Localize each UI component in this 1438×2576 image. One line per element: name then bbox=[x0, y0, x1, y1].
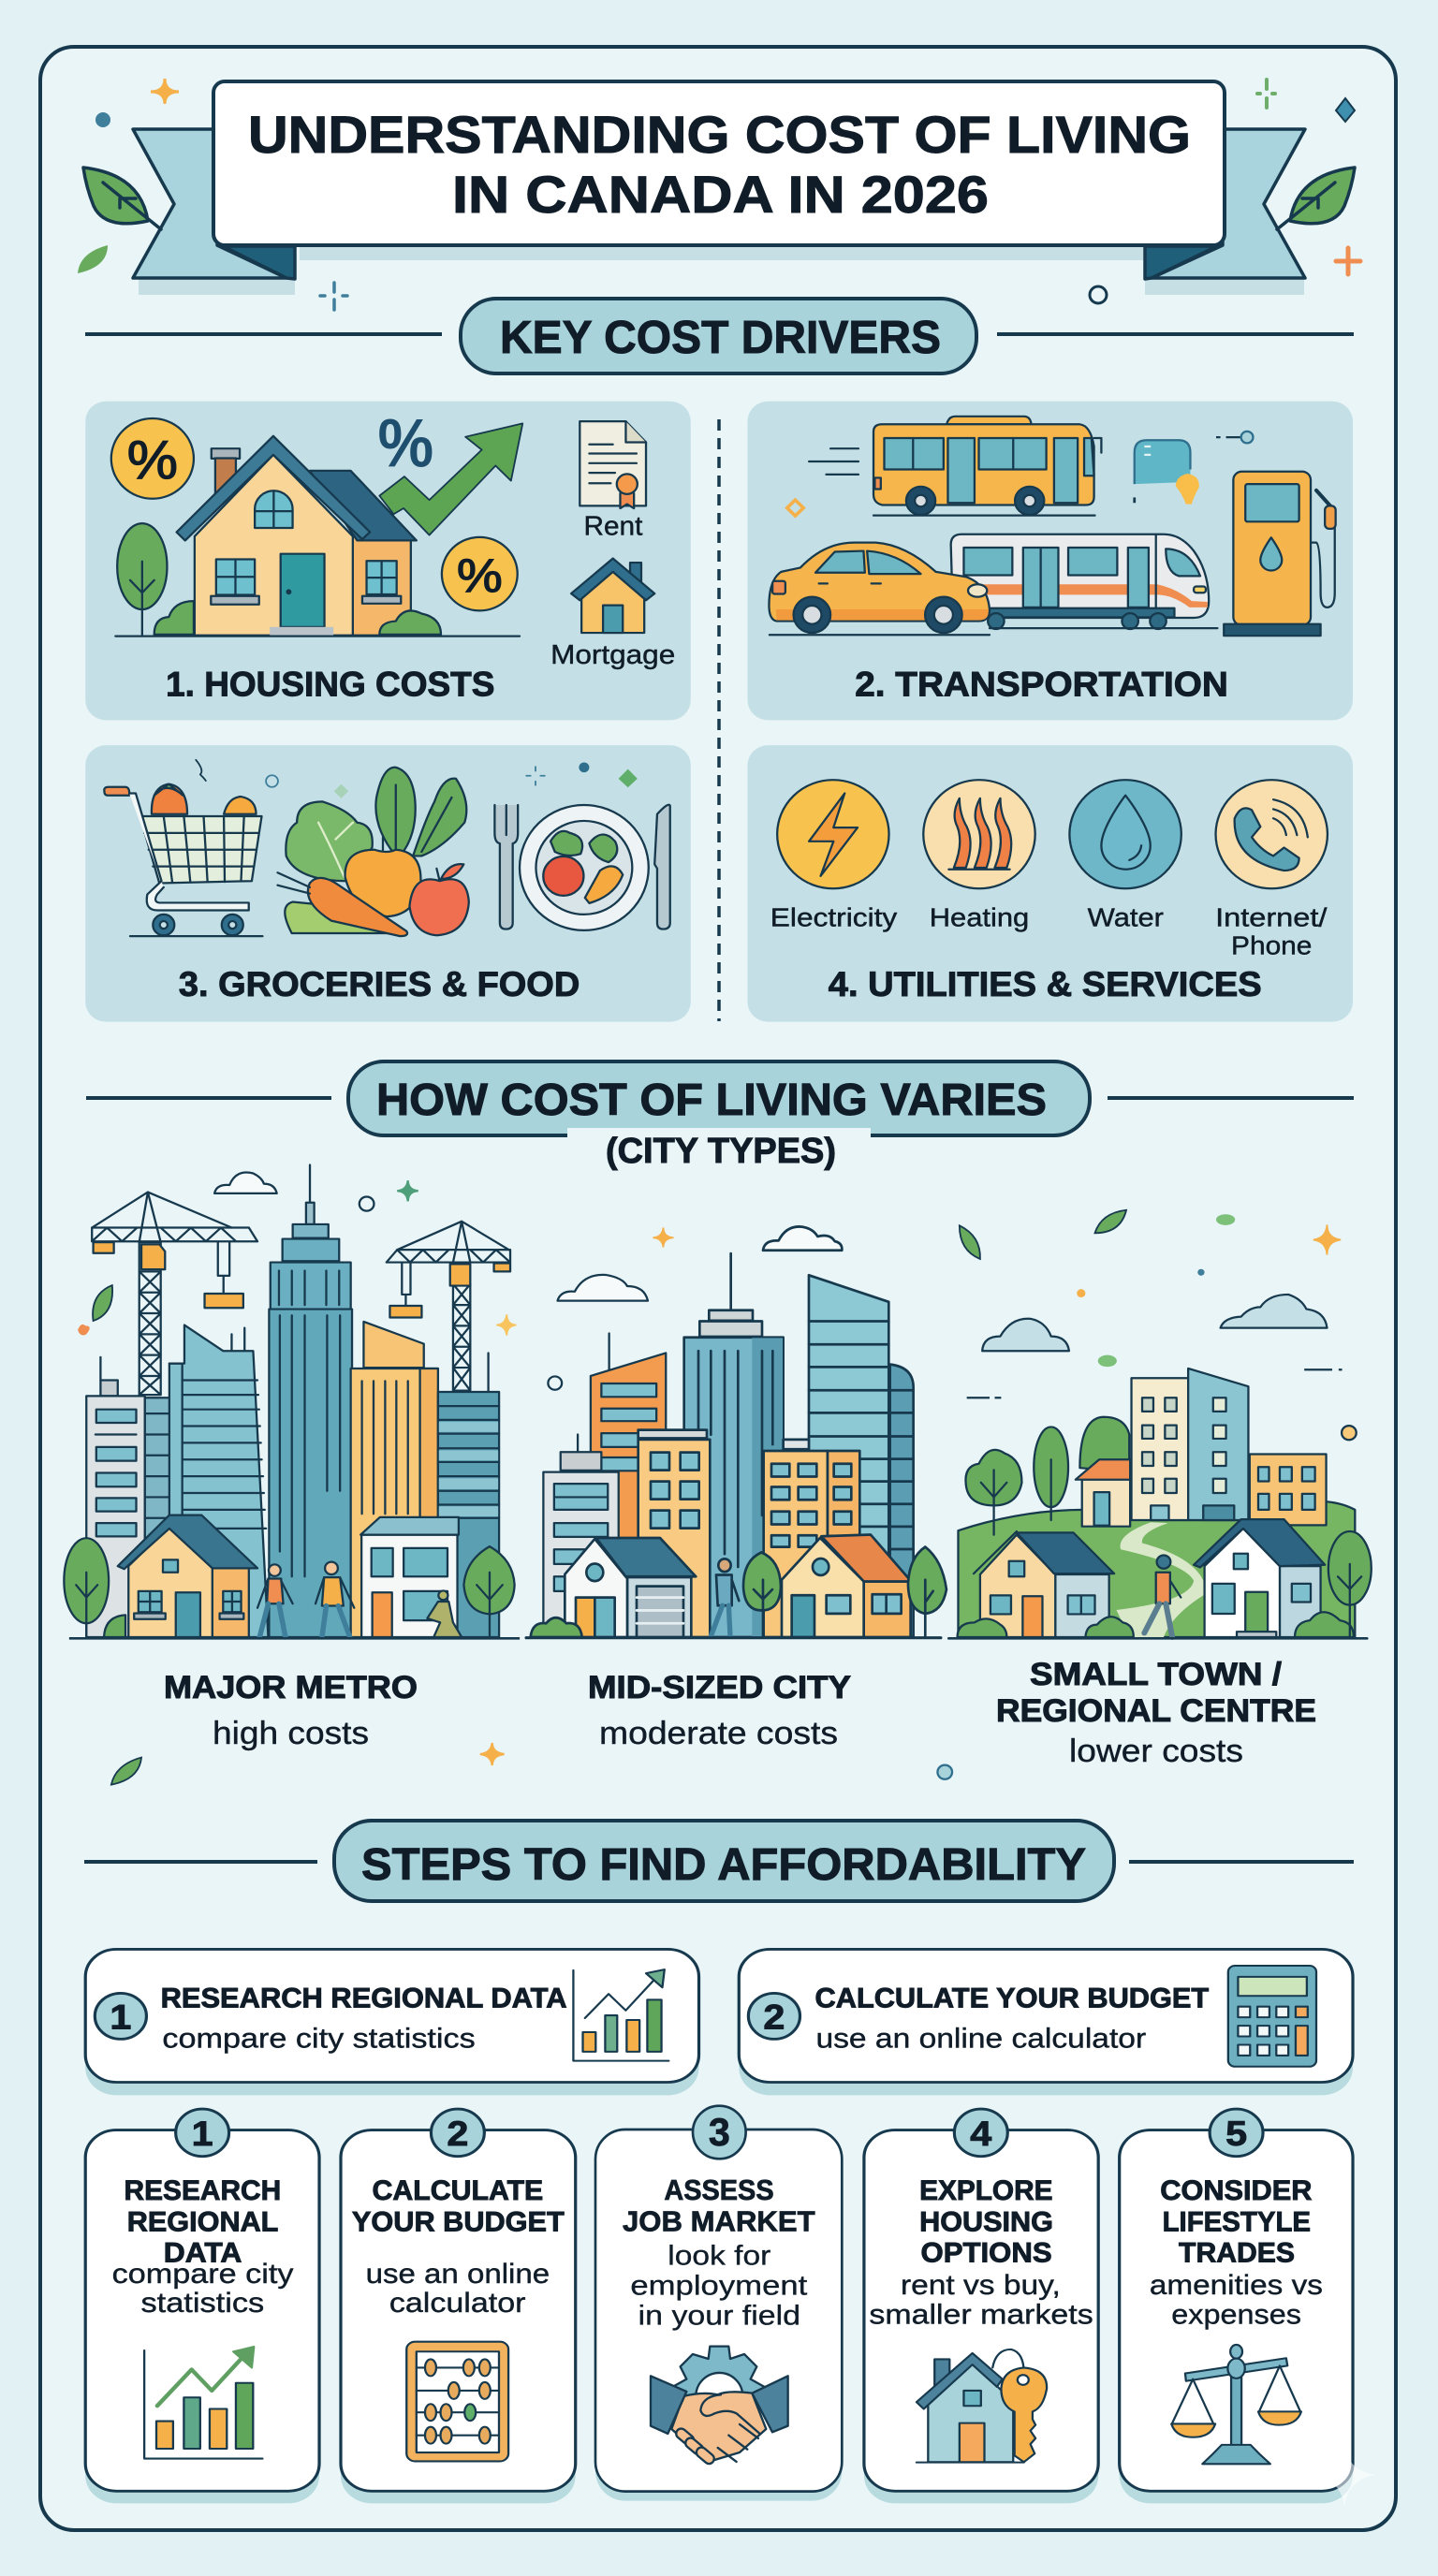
number badge: 2 bbox=[763, 1998, 785, 2037]
right crane bbox=[387, 1222, 510, 1391]
card description bbox=[366, 2259, 550, 2319]
card description: expenses bbox=[1171, 2299, 1301, 2330]
orange-roof house bbox=[782, 1535, 911, 1637]
city labels: major metro: high costs bbox=[213, 1716, 369, 1751]
step summary card 1 bbox=[85, 1949, 699, 2095]
ground line bbox=[69, 1635, 520, 1641]
icon: balance scales bbox=[1171, 2345, 1301, 2464]
icon: electricity bbox=[777, 780, 889, 888]
panel: transportation bbox=[747, 402, 1353, 720]
decorative sparkles bbox=[78, 1180, 674, 1785]
number badge: 3 bbox=[709, 2111, 730, 2154]
illustration: small town bbox=[937, 1210, 1372, 1779]
icon: rising arrow bbox=[379, 423, 522, 535]
grey office building bbox=[86, 1357, 170, 1637]
icon: calculator bbox=[1228, 1966, 1316, 2067]
card description: amenities vs bbox=[1150, 2270, 1323, 2301]
left house bbox=[1055, 1574, 1109, 1637]
number badge bbox=[176, 2109, 229, 2157]
icon: bus bbox=[809, 417, 1101, 516]
card description bbox=[869, 2270, 1093, 2330]
card description: use an online bbox=[366, 2259, 550, 2289]
panel title: 3. GROCERIES & FOOD bbox=[179, 965, 580, 1004]
step summary card 2 bbox=[739, 1949, 1353, 2095]
card text: use an online calculator bbox=[815, 2023, 1146, 2054]
decorative dots bbox=[266, 762, 638, 798]
card heading: OPTIONS bbox=[921, 2237, 1052, 2268]
panel title: 1. HOUSING COSTS bbox=[166, 666, 494, 704]
card heading: LIFESTYLE bbox=[1163, 2206, 1311, 2237]
illustration: mid-sized city bbox=[526, 1226, 946, 1638]
ground bbox=[526, 1633, 941, 1642]
white house with garage bbox=[531, 1538, 696, 1637]
icon: house bbox=[115, 436, 520, 637]
section heading: key cost drivers bbox=[85, 299, 1354, 373]
icon: heating bbox=[923, 780, 1035, 888]
card heading: CALCULATE bbox=[373, 2175, 543, 2205]
icon labels: Water bbox=[1088, 903, 1164, 931]
card heading: RESEARCH bbox=[125, 2175, 281, 2205]
panel: housing costs bbox=[85, 402, 691, 720]
winding path bbox=[1116, 1522, 1207, 1637]
percent sign: % bbox=[377, 403, 433, 481]
icon: train bbox=[951, 534, 1217, 629]
card heading bbox=[623, 2174, 815, 2237]
trees and bush bbox=[64, 1538, 515, 1637]
icon: bar chart bbox=[573, 1969, 668, 2061]
card description bbox=[112, 2259, 294, 2319]
number badge: 4 bbox=[970, 2115, 992, 2153]
city labels: mid-sized: moderate costs bbox=[599, 1716, 838, 1751]
city labels: small town: REGIONAL CENTRE bbox=[996, 1693, 1316, 1729]
title text: UNDERSTANDING COST OF LIVING bbox=[248, 105, 1191, 164]
city labels: mid-sized bbox=[588, 1670, 851, 1751]
bushes and right tree bbox=[958, 1618, 1006, 1637]
card description: employment bbox=[630, 2271, 807, 2302]
icon: vegetables bbox=[277, 768, 469, 936]
card heading: TRADES bbox=[1179, 2237, 1295, 2268]
floating leaves and dots bbox=[937, 1210, 1357, 1779]
tree right bbox=[908, 1547, 946, 1637]
icon: internet and phone bbox=[1216, 780, 1328, 888]
card heading bbox=[352, 2175, 565, 2237]
decorative leaves and sparkles in header bbox=[78, 79, 1360, 310]
section heading: steps to find affordability bbox=[84, 1821, 1354, 1901]
step card 2: calculate your budget bbox=[341, 2109, 576, 2503]
icon: growth chart bbox=[144, 2347, 262, 2459]
trees bbox=[743, 1552, 781, 1637]
cloud bbox=[763, 1226, 842, 1251]
panel: groceries and food bbox=[85, 745, 691, 1022]
panel title: 4. UTILITIES & SERVICES bbox=[829, 965, 1262, 1004]
icon: percent coin lower: % bbox=[457, 549, 503, 602]
number badge bbox=[954, 2109, 1007, 2157]
icon: shopping cart bbox=[104, 760, 262, 936]
ribbon shadows bbox=[139, 247, 1304, 295]
card description bbox=[630, 2240, 807, 2331]
card heading: HOUSING bbox=[919, 2206, 1053, 2237]
icon: house and key bbox=[917, 2349, 1047, 2463]
watermark sparkle bbox=[1313, 2445, 1376, 2507]
icon: fork and plate bbox=[494, 805, 670, 930]
card text: compare city statistics bbox=[162, 2023, 476, 2054]
panel title: 2. TRANSPORTATION bbox=[855, 666, 1228, 704]
icon: transit sign with bulb bbox=[787, 432, 1253, 516]
title banner bbox=[133, 81, 1305, 295]
number badge bbox=[431, 2109, 484, 2157]
city labels: major metro: MAJOR METRO bbox=[164, 1670, 418, 1705]
card description bbox=[1150, 2270, 1323, 2330]
icon: percent coin lower bbox=[442, 537, 518, 610]
card description: in your field bbox=[638, 2300, 800, 2331]
number badge bbox=[1210, 2109, 1263, 2157]
yellow apartment left bbox=[638, 1430, 710, 1637]
illustration: major metro bbox=[64, 1165, 674, 1785]
right ribbon tail bbox=[1145, 129, 1305, 279]
downtown tower bbox=[684, 1253, 784, 1637]
icon labels bbox=[770, 903, 1328, 959]
left ribbon tail bbox=[133, 129, 295, 279]
step card 4: explore housing options bbox=[864, 2109, 1098, 2503]
number badge bbox=[693, 2106, 746, 2159]
icon labels: Heating bbox=[930, 903, 1029, 931]
number badge bbox=[95, 1993, 146, 2039]
card description: rent vs buy, bbox=[901, 2270, 1061, 2301]
card description: compare city bbox=[112, 2259, 294, 2289]
card heading bbox=[1160, 2175, 1312, 2268]
number badge: 1 bbox=[192, 2115, 213, 2153]
pedestrian bbox=[1157, 1555, 1170, 1569]
title text bbox=[248, 105, 1191, 224]
number badge: 2 bbox=[447, 2115, 468, 2153]
white shop building bbox=[360, 1517, 459, 1637]
yellow apartment right bbox=[764, 1451, 859, 1637]
card heading: YOUR BUDGET bbox=[352, 2206, 565, 2237]
city labels: mid-sized: MID-SIZED CITY bbox=[588, 1670, 851, 1705]
section heading: key cost drivers: KEY COST DRIVERS bbox=[500, 313, 941, 363]
title text: IN CANADA IN 2026 bbox=[452, 165, 989, 224]
card text bbox=[161, 1983, 567, 2054]
left crane bbox=[92, 1193, 257, 1395]
city labels: major metro bbox=[164, 1670, 418, 1751]
icon: water bbox=[1069, 780, 1181, 888]
card text: RESEARCH REGIONAL DATA bbox=[161, 1983, 567, 2013]
card heading: REGIONAL bbox=[127, 2206, 278, 2237]
number badge bbox=[748, 1993, 800, 2039]
icon: gas pump bbox=[1224, 472, 1336, 636]
city labels: small town: lower costs bbox=[1069, 1734, 1243, 1769]
icon labels: Internet/ bbox=[1215, 903, 1328, 931]
icon: percent coin top: % bbox=[127, 432, 178, 490]
card heading: ASSESS bbox=[664, 2174, 774, 2206]
orange tower bbox=[351, 1322, 438, 1637]
card text bbox=[815, 1983, 1209, 2054]
card heading bbox=[125, 2175, 281, 2268]
step card 5: consider lifestyle trades bbox=[1120, 2109, 1353, 2503]
section heading: how cost of living varies: HOW COST OF LIVING VARIES bbox=[376, 1076, 1047, 1125]
card heading: DATA bbox=[164, 2237, 242, 2268]
ground bbox=[948, 1635, 1367, 1641]
section heading: how cost of living varies bbox=[86, 1061, 1354, 1171]
blue block bbox=[438, 1353, 499, 1637]
icon: mortgage house bbox=[571, 559, 654, 633]
card description: calculator bbox=[389, 2288, 525, 2319]
card heading: CONSIDER bbox=[1160, 2175, 1312, 2205]
tall tower bbox=[269, 1165, 352, 1637]
icon labels: Electricity bbox=[770, 903, 897, 931]
icon: car bbox=[769, 543, 990, 635]
clouds bbox=[214, 1173, 277, 1193]
icon labels: Phone bbox=[1231, 931, 1312, 959]
card description: statistics bbox=[140, 2288, 264, 2319]
banner card bbox=[213, 81, 1225, 245]
glass building bbox=[169, 1325, 268, 1637]
step card 1: research regional data bbox=[85, 2109, 319, 2503]
people walking bbox=[257, 1562, 462, 1637]
city labels: small town bbox=[996, 1657, 1316, 1769]
divider dashed bbox=[717, 419, 721, 1021]
panel: utilities and services bbox=[747, 745, 1353, 1022]
icon: percent coin top bbox=[111, 418, 194, 499]
label: rent: Rent bbox=[583, 512, 642, 541]
section heading: steps to find affordability: STEPS TO FIND AFFORDABILITY bbox=[361, 1840, 1086, 1890]
pedestrian bbox=[711, 1559, 739, 1636]
card heading bbox=[919, 2175, 1053, 2268]
icon: abacus bbox=[406, 2342, 508, 2461]
back trees and buildings bbox=[1079, 1417, 1129, 1472]
icon: handshake and gear bbox=[651, 2347, 788, 2466]
label: mortgage: Mortgage bbox=[550, 640, 675, 670]
card description: look for bbox=[668, 2240, 771, 2271]
glass skyscraper bbox=[784, 1275, 914, 1637]
right house bbox=[1280, 1566, 1321, 1637]
card heading: EXPLORE bbox=[919, 2175, 1053, 2205]
icon: rent document bbox=[580, 421, 646, 508]
section heading: how cost of living varies: (CITY TYPES) bbox=[606, 1132, 836, 1171]
card heading: JOB MARKET bbox=[623, 2205, 815, 2237]
card description: smaller markets bbox=[869, 2299, 1093, 2330]
step card 3: assess job market bbox=[595, 2106, 842, 2501]
clouds bbox=[982, 1319, 1069, 1351]
card text: CALCULATE YOUR BUDGET bbox=[815, 1983, 1209, 2013]
number badge: 1 bbox=[110, 1998, 131, 2037]
number badge: 5 bbox=[1225, 2115, 1247, 2153]
city labels: small town: SMALL TOWN / bbox=[1030, 1657, 1283, 1692]
suburban house bbox=[118, 1515, 257, 1637]
